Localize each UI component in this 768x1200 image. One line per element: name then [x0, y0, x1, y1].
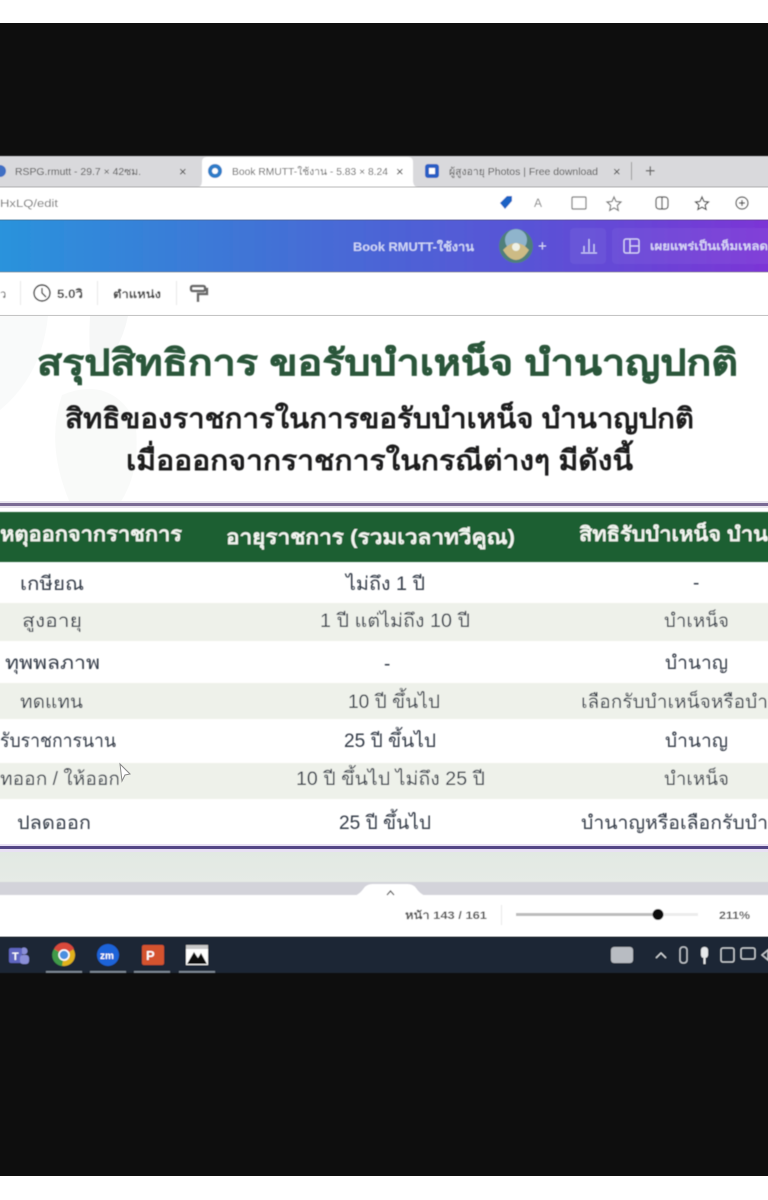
publish button: เผยแพร่เป็นเห็มเหลด	[650, 239, 768, 253]
tab: Book RMUTT: ×	[396, 164, 404, 179]
publish button	[612, 228, 768, 264]
row stripes	[0, 603, 768, 799]
row: ทดแทน: 10 ปี ขึ้นไป	[348, 688, 440, 713]
icon: price tag	[500, 196, 512, 209]
tab: Photos: ×	[613, 164, 621, 179]
tab: Photos: ผู้สูงอายุ Photos | Free download	[449, 166, 598, 178]
table	[0, 512, 768, 834]
icon: chrome	[52, 943, 75, 966]
row: ออก / ให้ออก: บำเหน็จ	[664, 766, 729, 790]
row: ปลดออก: 25 ปี ขึ้นไป	[339, 809, 431, 834]
icon: teams: T	[12, 951, 19, 963]
add button: +	[538, 238, 547, 255]
system tray icons	[611, 947, 768, 964]
row: เกษียณ: -	[693, 573, 699, 594]
tab: RSPG: ×	[179, 164, 187, 179]
row: ทุพพลภาพ: -	[384, 654, 390, 675]
icon: zoom	[97, 944, 119, 966]
row: ทดแทน: ทดแทน	[20, 692, 83, 713]
zoom percentage: 211%	[719, 910, 750, 922]
tab: RSPG	[0, 164, 187, 179]
browser address bar: HxLQ/edit	[0, 198, 58, 210]
tab: RSPG: RSPG.rmutt - 29.7 × 42ซม.	[15, 167, 141, 178]
row: ทดแทน: เลือกรับบำเหน็จหรือบำ	[581, 689, 768, 713]
editor header gradient bar	[0, 220, 768, 272]
row: เกษียณ	[20, 573, 699, 595]
decorative leaves	[0, 316, 137, 503]
table header: หตุออกจากราชการ	[0, 524, 182, 547]
page counter: หน้า 143 / 161	[405, 909, 487, 922]
row: รับราชการนาน: รับราชการนาน	[0, 731, 116, 752]
icon: powerpoint: P	[146, 948, 155, 963]
windows taskbar	[0, 937, 768, 973]
row: ปลดออก: บำนาญหรือเลือกรับบำ	[581, 813, 768, 834]
row: ออก / ให้ออก	[0, 765, 729, 790]
row: ทุพพลภาพ	[5, 653, 728, 675]
editor footer	[0, 882, 768, 937]
tab: Photos: +	[645, 161, 656, 181]
row: เกษียณ: เกษียณ	[20, 573, 84, 595]
table header: อายุราชการ (รวมเวลาทวีคูณ)	[226, 526, 515, 551]
table header	[0, 512, 768, 562]
icon: photos	[186, 945, 208, 965]
icon: clock and duration	[34, 285, 83, 301]
table bottom rule	[0, 844, 768, 852]
table header: สิทธิรับบำเหน็จ บำน	[579, 521, 768, 546]
row: สูงอายุ	[22, 608, 729, 633]
table body	[0, 573, 768, 834]
icon: zoom: zm	[100, 951, 114, 962]
row: เกษียณ: ไม่ถึง 1 ปี	[344, 573, 425, 595]
row: สูงอายุ: สูงอายุ	[22, 611, 82, 633]
browser tab strip	[0, 156, 768, 187]
row: สูงอายุ: บำเหน็จ	[664, 608, 729, 632]
row: รับราชการนาน	[0, 727, 728, 752]
icon: teams	[9, 948, 29, 964]
subtitle: เมื่อออกจากราชการในกรณีต่างๆ มีดังนี้	[126, 439, 634, 476]
next slide preview strip	[0, 852, 768, 884]
zoom slider	[516, 909, 698, 920]
row: ออก / ให้ออก: ทออก / ให้ออก	[0, 768, 120, 790]
row: ทุพพลภาพ: บำนาญ	[665, 653, 728, 674]
collapse tab	[348, 884, 432, 897]
browser toolbar icons: A	[534, 196, 542, 210]
editor toolbar: ว	[0, 289, 6, 301]
icon: powerpoint	[142, 945, 164, 965]
title: สรุปสิทธิการ ขอรับบำเหน็จ บำนาญปกติ	[37, 340, 738, 386]
subtitle	[65, 401, 694, 476]
tab: Photos	[425, 161, 656, 181]
row: ปลดออก: ปลดออก	[17, 813, 91, 834]
browser toolbar icons	[534, 196, 748, 210]
icon: chart	[570, 228, 606, 264]
row: สูงอายุ: 1 ปี แต่ไม่ถึง 10 ปี	[320, 610, 470, 632]
table top rule	[0, 501, 768, 508]
icon: clock and duration: 5.0วิ	[57, 287, 83, 301]
row: ทดแทน	[20, 688, 768, 713]
taskbar active indicators	[46, 971, 215, 973]
icon: paint roller	[191, 286, 207, 302]
editor toolbar	[0, 272, 768, 316]
slide panel	[0, 316, 768, 884]
row: รับราชการนาน: บำนาญ	[665, 731, 728, 752]
row: ออก / ให้ออก: 10 ปี ขึ้นไป ไม่ถึง 25 ปี	[296, 765, 485, 790]
position label: ตำแหน่ง	[113, 288, 161, 301]
document name: Book RMUTT-ใช้งาน	[353, 239, 475, 254]
row: ปลดออก	[17, 809, 768, 834]
tab: Book RMUTT	[208, 164, 404, 179]
row: ทุพพลภาพ: ทุพพลภาพ	[5, 653, 100, 675]
browser address bar	[0, 187, 768, 220]
tab: Book RMUTT: Book RMUTT-ใช้งาน - 5.83 × 8.24	[232, 166, 388, 178]
icon: avatar	[499, 229, 533, 263]
icon: mouse cursor	[120, 764, 130, 781]
row: รับราชการนาน: 25 ปี ขึ้นไป	[344, 727, 436, 752]
subtitle: สิทธิของราชการในการขอรับบำเหน็จ บำนาญปกติ	[65, 401, 694, 435]
